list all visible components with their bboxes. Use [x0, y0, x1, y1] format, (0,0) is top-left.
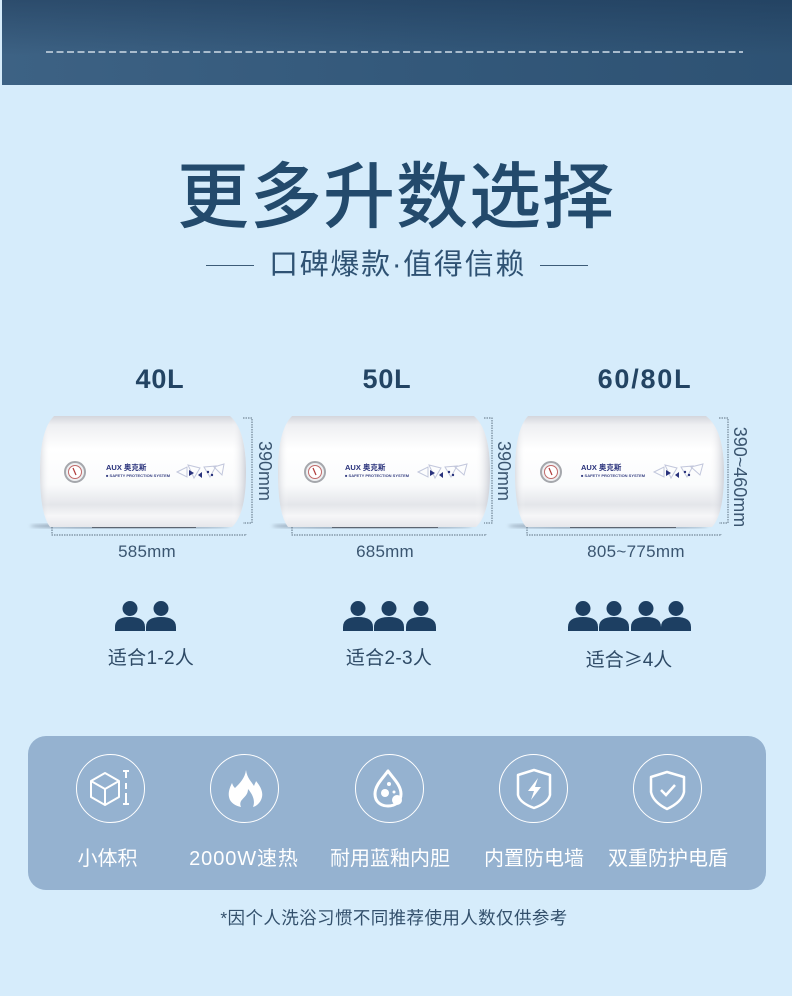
people suitability labels: 适合≥4人: [586, 645, 672, 672]
product capacity labels: 50L: [363, 364, 411, 394]
feature labels: [78, 848, 728, 870]
feature labels: 耐用蓝釉内胆: [330, 848, 450, 870]
feature labels: 内置防电墙: [484, 848, 584, 870]
height dimension labels: 390~460mm: [730, 427, 750, 527]
icon: cube small size: [76, 754, 144, 822]
icon: four people: [568, 601, 691, 631]
title: 更多升数选择: [177, 158, 615, 238]
icon: glaze droplet: [356, 754, 424, 822]
width dimension labels: 585mm: [118, 542, 176, 561]
people suitability labels: [108, 645, 672, 672]
icon: shield check: [634, 754, 702, 822]
people suitability labels: 适合1-2人: [108, 648, 194, 669]
feature labels: 小体积: [78, 848, 138, 870]
people suitability labels: 适合2-3人: [346, 648, 432, 669]
water heater 40L: AUX 奥克斯: [106, 462, 147, 472]
product capacity labels: 40L: [136, 364, 184, 394]
water heater 50L: [272, 416, 492, 535]
product capacity labels: [136, 364, 692, 394]
height dimension labels: 390mm: [494, 441, 514, 501]
panel: features: [28, 736, 766, 890]
water heater 60/80L: AUX 奥克斯: [581, 462, 622, 472]
header banner: [2, 0, 792, 85]
subtitle: 口碑爆款·值得信赖: [269, 249, 526, 281]
width dimension labels: [118, 542, 685, 561]
width dimension labels: 805~775mm: [587, 542, 685, 561]
product capacity labels: 60/80L: [598, 364, 692, 394]
icon: two people: [115, 601, 176, 631]
water heater 50L: ■ SAFETY PROTECTION SYSTEM: [345, 473, 410, 478]
water heater 60/80L: ■ SAFETY PROTECTION SYSTEM: [581, 473, 646, 478]
feature labels: 2000W速热: [189, 848, 299, 870]
footnote: *因个人洗浴习惯不同推荐使用人数仅供参考: [220, 908, 568, 928]
icon: three people: [343, 601, 436, 631]
water heater 50L: AUX 奥克斯: [345, 462, 386, 472]
water heater 40L: ■ SAFETY PROTECTION SYSTEM: [106, 473, 171, 478]
icon: shield bolt: [500, 754, 568, 822]
height dimension labels: 390mm: [255, 441, 275, 501]
width dimension labels: 685mm: [356, 542, 414, 561]
water heater 40L: [30, 416, 252, 535]
feature labels: 双重防护电盾: [608, 848, 728, 870]
water heater 60/80L: [508, 416, 728, 535]
icon: flame: [210, 754, 278, 822]
